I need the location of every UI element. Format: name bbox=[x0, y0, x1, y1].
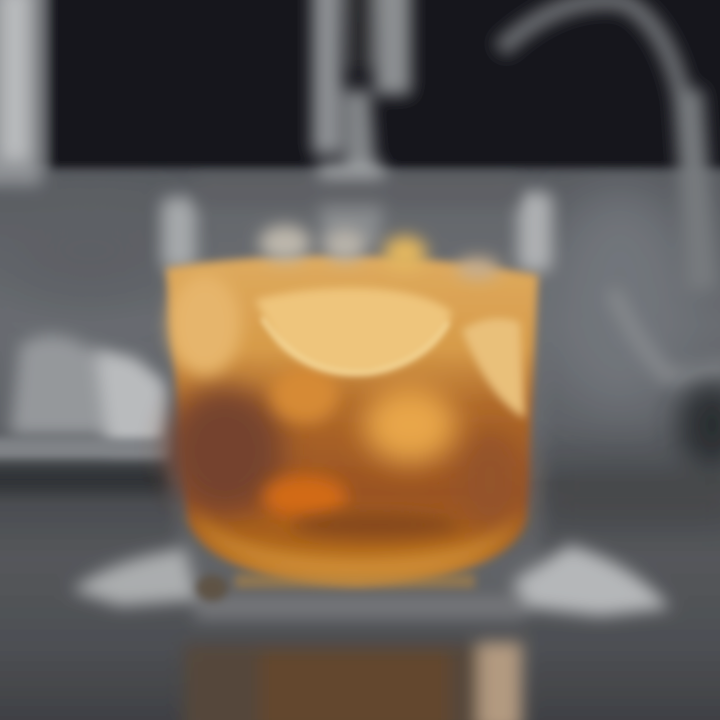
background: left pale pillar bbox=[0, 0, 42, 185]
liquid: orange glow centre bottom bbox=[263, 475, 347, 519]
liquid: pale left upper bbox=[169, 275, 241, 375]
glass: thick base bbox=[196, 574, 475, 601]
glass: body bbox=[160, 178, 552, 590]
liquid: lemon slice large bbox=[255, 288, 452, 375]
background: left white object and counter bbox=[0, 335, 170, 492]
glass: amber liquid bbox=[166, 256, 538, 585]
background: curved faucet at right bbox=[500, 1, 720, 378]
liquid: bright base rim bbox=[192, 510, 522, 582]
white foam spill around the glass base bbox=[72, 545, 670, 620]
ice cubes above the liquid bbox=[259, 225, 500, 279]
reflection of the drink on the table bbox=[184, 642, 522, 720]
liquid: golden ice cube right bbox=[364, 387, 456, 463]
background: dark right object bbox=[550, 383, 720, 520]
liquid: lemon rim highlight bbox=[262, 318, 448, 373]
liquid: dark band near base bbox=[290, 512, 460, 538]
background: dark window panel bbox=[50, 0, 720, 168]
liquid: dark right shade bbox=[458, 430, 522, 530]
liquid: orange ice cube centre bbox=[271, 367, 339, 423]
water stream pouring bbox=[312, 0, 411, 245]
liquid: dark brown left shade bbox=[167, 388, 283, 512]
liquid: lemon slice right bbox=[462, 318, 525, 418]
